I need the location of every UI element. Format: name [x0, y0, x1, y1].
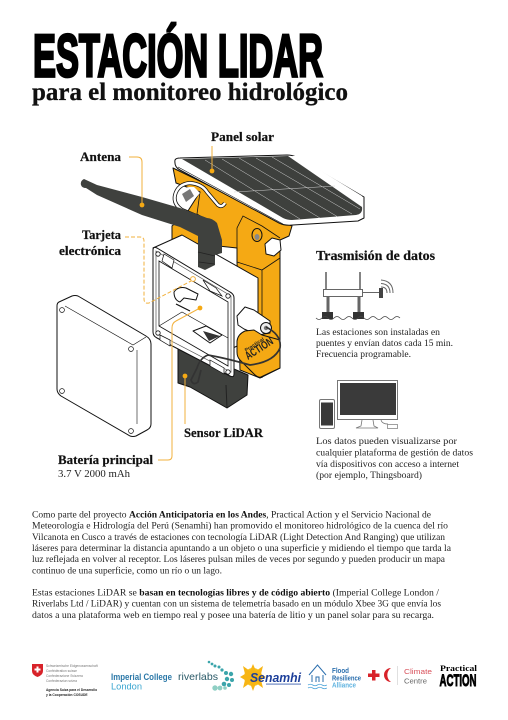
label: sensor lidar: Sensor LiDAR: [184, 425, 264, 440]
logo: Swiss cooperation: Agencia Suiza para el Desarrollo: [46, 688, 97, 692]
logo: riverlabs: [178, 661, 234, 691]
body paragraph 1: continuo de una superficie, como un río o un lago.: [32, 565, 222, 576]
logo: Swiss cooperation: Schweizerische Eidgenossenschaft: [46, 664, 98, 668]
body paragraph 1: Vilcanota en Cusco a través de estaciones con tecnología LiDAR (Light Detection And Ranging) que utilizan: [32, 532, 445, 543]
logo: Swiss cooperation: Confédération suisse: [46, 669, 77, 673]
Practical Action tag: [237, 330, 280, 377]
logo: Senamhi: [240, 664, 301, 691]
body paragraph 2: [32, 588, 441, 621]
body paragraph 1: Como parte del proyecto Acción Anticipatoria en los Andes, Practical Action y el Servicio Nacional de: [32, 510, 431, 520]
logo: Flood Resilience Alliance: [308, 665, 361, 690]
logo: Swiss cooperation: Confederaziun svizra: [46, 679, 77, 683]
text: stations: [316, 327, 453, 360]
heading: trasmisión de datos: Trasmisión de datos: [316, 248, 435, 263]
logo: Swiss cooperation: Confederazione Svizzera: [46, 674, 83, 678]
text: data visualisation: (por ejemplo, Thingsboard): [316, 470, 422, 481]
label: panel solar: Panel solar: [211, 129, 274, 144]
logo: Practical Action: Practical: [440, 663, 478, 673]
label: tarjeta electrónica: Tarjeta: [82, 227, 121, 242]
station illustration: [81, 155, 364, 408]
label: tarjeta electrónica: [59, 227, 195, 303]
logo: Swiss cooperation: [32, 664, 98, 697]
text: data visualisation: [316, 436, 473, 481]
black cable: [191, 327, 280, 384]
label: sensor lidar: [183, 374, 264, 440]
body paragraph 1: luz reflejada en volver al receptor. Los láseres pulsan miles de veces por segundo y pueden producir un mapa: [32, 554, 446, 565]
Practical Action tag: ACTION: [243, 336, 276, 363]
text: data visualisation: cualquier plataforma de gestión de datos: [316, 448, 473, 458]
logo: Practical Action: ACTION: [440, 671, 476, 690]
logo: Swiss cooperation: y la Cooperación COSUDE: [46, 693, 88, 697]
logo: riverlabs: riverlabs: [178, 671, 218, 683]
logo: Practical Action: [440, 663, 478, 690]
text: data visualisation: vía dispositivos con acceso a internet: [316, 459, 459, 470]
body paragraph 2: Riverlabs Ltd / LiDAR) y cuentan con un sistema de telemetría basado en un módulo Xbee 3G que envía los: [32, 599, 441, 610]
logo: Flood Resilience Alliance: Resilience: [332, 676, 361, 682]
logo: Red Cross Red Crescent Climate Centre: [368, 666, 432, 686]
logo: Flood Resilience Alliance: Flood: [332, 668, 349, 675]
text: stations: puentes y envían datos cada 15 min.: [316, 338, 453, 349]
label: batería principal: 3.7 V 2000 mAh: [58, 468, 130, 480]
antenna: [81, 179, 222, 270]
label: batería principal: Batería principal: [58, 452, 153, 467]
body paragraph 2: datos a una plataforma web en tiempo real y posee una batería de litio y un panel solar para su recarga.: [32, 610, 434, 621]
battery cover: [57, 296, 151, 436]
open enclosure: [153, 235, 258, 377]
circuit board parts: [174, 288, 222, 343]
LiDAR sensor: [178, 345, 248, 408]
label: tarjeta electrónica: electrónica: [59, 243, 122, 258]
logo: Flood Resilience Alliance: Alliance: [332, 682, 356, 690]
logo: Imperial College London: Imperial College: [111, 672, 172, 683]
Practical Action tag: Practical: [244, 336, 266, 354]
body paragraph 1: [32, 510, 452, 576]
icon: bridge with sensor: [316, 272, 400, 320]
text: data visualisation: Los datos pueden visualizarse por: [316, 436, 458, 447]
solar panel: [175, 155, 364, 225]
white cable loop: [175, 183, 225, 223]
logo: Senamhi: Senamhi: [250, 670, 301, 685]
label: antena: [80, 149, 144, 207]
body paragraph 1: Meteorología e Hidrología del Perú (Senamhi) han promovido el monitoreo hidrológico de la cuenca del río: [32, 521, 448, 532]
label: antena: Antena: [80, 149, 122, 164]
bolt on arm: [252, 228, 281, 256]
logo: Red Cross Red Crescent Climate Centre: Climate: [404, 667, 432, 676]
body paragraph 2: Estas estaciones LiDAR se basan en tecnologías libres y de código abierto (Imperial College London /: [32, 588, 439, 598]
yellow mounting arm: [172, 168, 292, 378]
text: stations: Frecuencia programable.: [316, 349, 411, 360]
text: stations: Las estaciones son instaladas en: [316, 327, 440, 338]
label: panel solar: [210, 129, 274, 173]
cable gland: [237, 307, 272, 335]
label: batería principal: [58, 306, 202, 480]
logo: Imperial College London: London: [111, 682, 142, 692]
subtitle: para el monitoreo hidrológico: [32, 79, 348, 106]
logo: Imperial College London: [111, 672, 172, 692]
body paragraph 1: láseres para determinar la distancia apuntando a un objeto o una superficie y midiendo el tiempo que tarda la: [32, 543, 452, 554]
icon: computer and phone: [320, 380, 398, 428]
logo: Red Cross Red Crescent Climate Centre: Centre: [404, 676, 427, 686]
